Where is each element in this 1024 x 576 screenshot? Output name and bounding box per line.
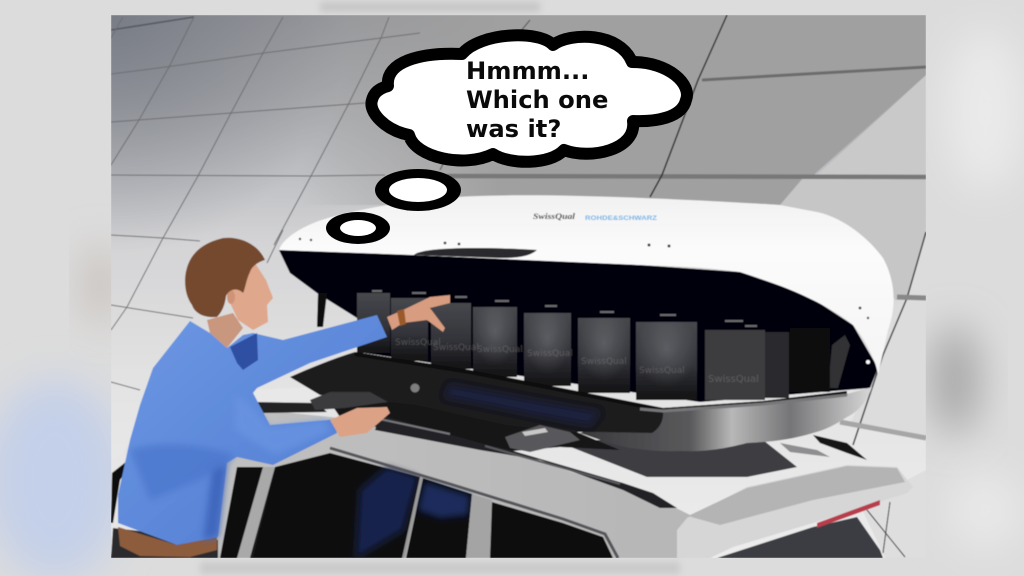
open lid interior: [279, 250, 878, 402]
batteries: SwissQual: [433, 343, 479, 353]
batteries: SwissQual: [639, 366, 685, 376]
batteries: SwissQual: [477, 345, 523, 355]
bubble text: was it?: [466, 115, 561, 143]
batteries: SwissQual: [395, 338, 441, 348]
wall panels: [111, 15, 926, 558]
car windows: [220, 448, 618, 558]
large thought circle outline: [375, 169, 461, 211]
batteries: [357, 290, 830, 400]
lid logos: ROHDE&SCHWARZ: [585, 215, 657, 222]
man: [111, 238, 450, 558]
batteries: SwissQual: [708, 374, 759, 385]
lid logos: SwissQual: [533, 212, 576, 221]
small thought circle centre: [340, 220, 376, 236]
white lid: [279, 195, 894, 375]
rack shadow band under the box: [334, 401, 619, 452]
roof rack clamps: [310, 392, 580, 452]
batteries: SwissQual: [527, 349, 573, 359]
small thought circle outline: [326, 212, 390, 244]
trousers and belt: [111, 527, 218, 558]
large thought circle centre: [389, 178, 447, 202]
roof box tray and lower shell: [290, 352, 872, 451]
car body and roof: [111, 387, 926, 558]
lid logos: [532, 212, 658, 221]
shirt torso and sleeves: [118, 315, 387, 545]
right rear window surround: [860, 470, 926, 558]
bubble text: Hmmm...: [466, 57, 589, 85]
bubble text: Which one: [466, 86, 608, 114]
cloud: [371, 35, 687, 162]
hair: [185, 238, 265, 317]
hands and watch: [330, 295, 450, 437]
neck and face: [207, 260, 273, 348]
batteries: SwissQual: [581, 357, 627, 367]
photo: man loading roof box: [111, 15, 926, 558]
thought bubble: [326, 35, 687, 244]
spoiler: [677, 465, 913, 558]
